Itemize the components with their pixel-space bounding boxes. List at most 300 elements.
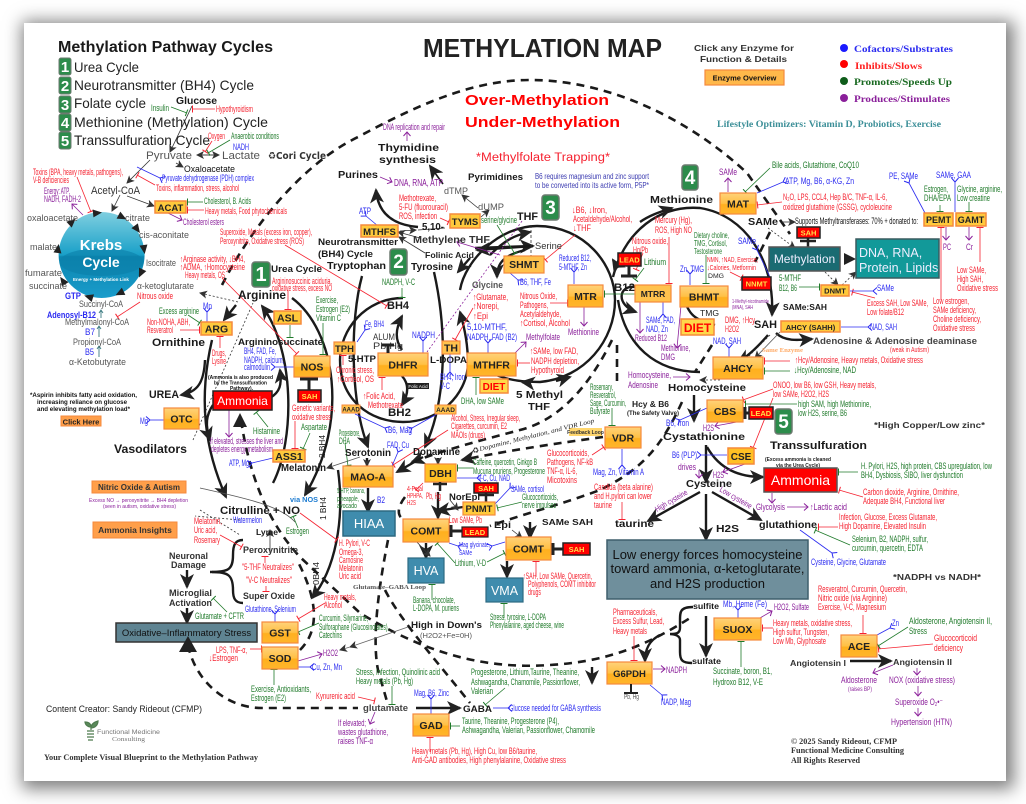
enzyme: COMT left with LEAD [403, 519, 488, 542]
panel: methionine cycle: Supports Methyltransferases: 70% + donated to: [795, 216, 918, 226]
enzyme: BHMT [680, 286, 728, 307]
ammonia box: transsulfuration side [764, 468, 837, 492]
panel: Krebs cycle [25, 208, 194, 368]
enzyme: ASL: ASL [277, 312, 299, 324]
enzyme: COMT right with SAH: SAH [569, 545, 584, 554]
enzyme: ARG: ARG [205, 324, 228, 336]
panel: transsulfuration: Selenium, B2, NADPH, sulfur, [852, 534, 928, 544]
panel: Krebs cycle: Adenosyl-B12 [47, 310, 96, 320]
VDR loop: Sage, Curcumin, [590, 398, 626, 408]
panel: methionine cycle: ↓Calories, Metformin [707, 263, 756, 272]
panel: angiotensin: Angiotensin II [893, 657, 952, 667]
enzyme: MAT [720, 193, 756, 214]
panel: angiotensin: Hypertension (HTN) [891, 717, 952, 727]
enzyme: SHMT [504, 256, 544, 273]
panel: folate cycle: 3 [545, 198, 556, 219]
panel: GABA: Stress, Infection, Quinolinic acid [356, 667, 440, 677]
panel: methionine cycle: SAMe [738, 236, 756, 246]
panel: PEMT and GAMT: PE, SAMe [889, 171, 918, 181]
inhibitor: NNMT [742, 277, 771, 290]
panel: neurotransmitter BH4 cycle: 5-HTP, banana, [337, 488, 365, 495]
panel: catecholamines: H2S [407, 500, 416, 507]
panel: folate cycle: ↓THF [573, 223, 591, 233]
panel: GABA: Ashwagandha, Valerian, Passionflower, Chamomile [462, 725, 595, 735]
panel: PEMT and GAMT: Oxidative stress [933, 323, 975, 333]
panel: catecholamines: Stress, tyrosine, L-DOPA [490, 612, 546, 622]
panel: urea cycle: Lysine [212, 356, 226, 366]
VDR loop: taurine [615, 518, 654, 530]
panel: glycolysis and Cori cycle: Cholesterol, B. Acids [204, 196, 251, 206]
panel: glycolysis and Cori cycle [33, 95, 326, 227]
panel: neurotransmitter BH4 cycle: ALUM [373, 332, 395, 342]
panel: urea cycle: Estrogen [286, 526, 309, 536]
panel: folate cycle: DNA replication and repair [383, 122, 445, 132]
panel: neurotransmitter BH4 cycle: Melatonin [339, 563, 363, 573]
panel: sulfite and G6PDH: Excess Sulfur, Lead, [613, 616, 664, 626]
panel: folate cycle: 5 Methyl [516, 389, 563, 401]
panel: urea cycle: Citrulline + NO [220, 505, 300, 517]
panel: neurotransmitter BH4 cycle: Chronic stress, [336, 365, 374, 375]
panel: methionine cycle: Reduced B12 [635, 333, 667, 343]
panel: transsulfuration: *High Copper/Low zinc* [874, 420, 986, 430]
panel: transsulfuration: ONOO, low B6, low GSH, Heavy metals, [773, 380, 876, 390]
VDR loop: Candida (beta alanine) [594, 482, 653, 492]
panel: methylation output: B12, B6 [779, 283, 797, 293]
panel: folate cycle: Reduced B12, [559, 253, 591, 263]
panel: sulfite and G6PDH: Hydroxo B12, V-E [713, 677, 763, 687]
panel: sulfite and G6PDH: H2O2, Sulfate [774, 602, 809, 612]
panel: urea cycle: Aspartate [301, 422, 327, 432]
inhibitor: NNMT: NNMT [746, 280, 768, 288]
panel: Krebs cycle: succinate [29, 281, 67, 292]
panel: folate cycle: ↓B6, ↓Iron, [572, 205, 607, 215]
panel: urea cycle: BH4, FAD, Fe, [244, 346, 276, 356]
inhibitor: SAH at DBH: SAH [478, 484, 494, 493]
diet tag: BHMT: DIET [684, 321, 712, 335]
panel: catecholamines: NorEpi [449, 492, 480, 503]
panel: glycolysis and Cori cycle: NADH, FADH-2 [44, 194, 81, 204]
panel: GABA: GABA [463, 704, 493, 714]
panel: transsulfuration: H2S [713, 470, 724, 480]
inhibitor: SAH at DBH [474, 483, 498, 493]
enzyme: SOD: SOD [269, 653, 292, 665]
panel: urea cycle: Resveratrol [147, 325, 173, 335]
panel: folate cycle: 5,10- [422, 221, 444, 233]
VDR loop: and H.pylori can lower [594, 491, 652, 501]
arrow: up to oxidative stress [179, 636, 197, 652]
panel: methionine cycle: Adenosine & Adenosine deaminase [813, 336, 977, 346]
panel: methionine cycle: DMG [708, 274, 724, 280]
panel: transsulfuration: ↑Lactic acid [810, 502, 847, 512]
panel: transsulfuration: Infection, Glucose, Excess Glutamate, [839, 512, 937, 522]
inhibitor: LEAD at MTRR [618, 253, 641, 276]
panel: methylation output: DNMT [824, 286, 846, 296]
panel: methylation output: 5-MTHF [779, 273, 801, 283]
panel: legend and enzyme overview: Promotes/Speeds Up [854, 78, 952, 88]
panel: legend and enzyme overview: Inhibits/Slows [855, 62, 922, 72]
panel: PEMT and GAMT: Glycine, arginine, [957, 184, 1002, 194]
panel: urea cycle: Rosemary [194, 535, 220, 545]
credits [44, 704, 259, 762]
panel: oxidative stress: Activation [169, 598, 212, 608]
enzyme: BHMT: BHMT [689, 292, 720, 304]
enzyme: GST [262, 622, 298, 643]
panel: catecholamines: HPHPA, [407, 493, 423, 500]
diet tag: MTHFR [480, 379, 508, 393]
panel: folate cycle: Nitrous Oxide, [520, 291, 557, 301]
enzyme: MAT: MAT [727, 198, 750, 210]
panel: methionine cycle: Lithium [644, 257, 666, 267]
panel: sulfite and G6PDH: NADP, Mag [661, 697, 691, 707]
panel: glycolysis and Cori cycle: Cholesterol esters [183, 217, 224, 227]
panel: urea cycle: Mg [140, 416, 148, 426]
panel: angiotensin [790, 572, 992, 727]
enzyme: OTC: OTC [170, 414, 193, 426]
panel: GABA: Heavy metals (Pb, Hg), High Cu, low B6/taurine, [412, 746, 537, 756]
panel: transsulfuration: via the Urea Cycle) [776, 463, 820, 469]
panel: glycolysis and Cori cycle: Lactate [222, 150, 260, 162]
metabolite box: HIAA: HIAA [354, 516, 384, 531]
panel: transsulfuration: Low cysteine [718, 485, 754, 511]
panel: transsulfuration: Adequate BH4, Functional liver [863, 496, 945, 506]
panel: glycolysis and Cori cycle: Insulin [151, 103, 169, 113]
panel: urea cycle: Non-NOHA, ABH, [147, 317, 190, 327]
enzyme: MAO-A [343, 466, 393, 487]
panel: folate cycle: ↑SAMe, low FAD, [530, 346, 578, 356]
panel: neurotransmitter BH4 cycle: ↑Cortisol, OS [337, 374, 374, 384]
panel: catecholamines: ↑SAH, Low SAMe, Quercetin, [523, 571, 592, 581]
callout: low energy box [607, 540, 808, 599]
VDR loop: Micotoxins [547, 475, 577, 485]
enzyme: COMT left with LEAD: LEAD [465, 528, 486, 537]
panel: urea cycle: Vitamin C [316, 313, 341, 323]
panel: neurotransmitter BH4 cycle: 5-HTP [348, 354, 377, 365]
enzyme: CSE: CSE [731, 452, 752, 463]
panel: glycolysis and Cori cycle: NADH [233, 142, 249, 152]
arrow: dashed up into ammonia [233, 413, 247, 427]
panel: methionine cycle: NAD, Zn [646, 324, 668, 334]
panel: glycolysis and Cori cycle: Anaerobic conditions [231, 131, 279, 141]
teal precursor arrows [97, 310, 103, 357]
enzyme: DHFR: DHFR [388, 360, 418, 372]
panel: neurotransmitter BH4 cycle: (BH4) Cycle [318, 249, 373, 260]
panel: glycolysis and Cori cycle: V-B deficiencies [33, 175, 69, 185]
panel: methionine cycle: Dietary choline, [694, 231, 729, 240]
panel: urea cycle: (Ammonia is also produced [208, 375, 273, 381]
panel: PEMT and GAMT: DHA/EPA [924, 193, 951, 203]
inhibitor lines [77, 109, 980, 752]
panel: Krebs cycle: fumarate [25, 268, 62, 279]
panel: Krebs cycle: Krebs [80, 237, 122, 254]
panel: neurotransmitter BH4 cycle: Pb Hg [373, 341, 403, 351]
panel: catecholamines: Epi [494, 520, 511, 531]
VDR loop: Feedback Loop [567, 430, 604, 436]
panel: glycolysis and Cori cycle: ♻Cori Cycle [268, 151, 326, 162]
over and under methylation headings: Under-Methylation [465, 115, 620, 131]
panel: transsulfuration: Carbon dioxide, Arginine, Ornithine, [863, 487, 959, 497]
panel: Krebs cycle: cis-aconitate [139, 230, 189, 241]
panel: Krebs cycle: Isocitrate [146, 258, 176, 268]
panel: glycolysis and Cori cycle: Pyruvate dehydrogenase (PDH) complex [162, 173, 254, 183]
panel: catecholamines: drugs [528, 587, 541, 597]
panel: angiotensin: Superoxide O₂•⁻ [895, 697, 943, 707]
metabolite box: HVA: HVA [414, 564, 439, 578]
panel: catecholamines: Mucuna pruriens, Progesterone [473, 466, 545, 476]
panel: GABA: If elevated; [338, 718, 366, 728]
thick solid pathway arrows [181, 166, 891, 708]
panel: urea cycle: 1 [255, 264, 267, 286]
enzyme: NOS with SAH inhibitor [294, 356, 330, 402]
panel: catecholamines: Glucocorticoids, [522, 492, 558, 502]
enzyme: COMT right with SAH: COMT [513, 544, 545, 556]
panel: transsulfuration: drives [678, 462, 696, 472]
panel: urea cycle: depletes energy metabolism [211, 444, 273, 454]
panel: methylation output: DNA, RNA, [859, 246, 922, 260]
panel: catecholamines: Pb, Hg [426, 491, 441, 501]
panel: sulfite and G6PDH: Heavy metals, oxidative stress, [773, 618, 852, 628]
over and under methylation headings [465, 93, 620, 164]
panel: GABA: glutamate [363, 703, 408, 713]
panel: urea cycle: Exercise, [316, 295, 338, 305]
panel: oxidative stress: Cu, Zn, Mn [312, 662, 342, 672]
panel: urea cycle: Excess arginine [159, 306, 199, 316]
panel: methionine cycle: TMG, Cortisol, [694, 239, 727, 248]
panel: urea cycle: oxidative stress [292, 412, 331, 422]
panel: oxidative stress: ↓Estrogen [209, 653, 238, 663]
VDR loop: Rosemary, [590, 382, 613, 392]
panel: glycolysis and Cori cycle: Pyruvate [146, 150, 192, 162]
panel: methionine cycle: Homocysteine [668, 382, 746, 394]
panel: urea cycle: If elevated, stresses the liver and [210, 436, 283, 446]
panel: GABA: Taurine, Theanine, Progesterone (P4), [462, 716, 559, 726]
enzyme: DHFR [378, 344, 428, 376]
panel: oxidative stress: Neuronal [169, 551, 208, 561]
panel: transsulfuration: high SAM, high Methionine, [798, 399, 871, 409]
panel: folate cycle: ↑Epi [473, 311, 488, 321]
panel: folate cycle: Methionine [568, 327, 599, 337]
panel: folate cycle: serine/glycine [481, 215, 517, 225]
panel: transsulfuration: 5 [778, 412, 789, 433]
enzyme: AHCY: AHCY [723, 363, 753, 375]
VDR loop [472, 382, 654, 530]
enzyme: ASL [274, 311, 301, 324]
panel: neurotransmitter BH4 cycle: H. Pylori, V-C [339, 538, 370, 548]
panel: neurotransmitter BH4 cycle: avocado [337, 503, 357, 510]
panel: methionine cycle: oxidized glutathione (GSSG), cycloleucine [783, 202, 892, 212]
panel: urea cycle: Ornithine [152, 337, 205, 349]
panel: methionine cycle: SAMe, FAD, [646, 315, 675, 325]
panel: folate cycle: synthesis [379, 154, 436, 166]
panel: Krebs cycle: Nitrous oxide [137, 291, 173, 301]
panel: urea cycle: 0BH4 [312, 561, 321, 585]
panel: urea cycle: 1 BH4 [319, 496, 328, 520]
panel: angiotensin: Angiotensin I [790, 658, 846, 668]
panel: methionine cycle: Methionine [650, 194, 713, 206]
panel: urea cycle: Argininosuccinic aciduria, [272, 276, 332, 286]
enzyme: DBH: DBH [429, 468, 452, 480]
panel: pathway cycles legend: Methylation Pathway Cycles [58, 39, 273, 56]
panel: catecholamines: L-DOPA, M. puriens [413, 603, 459, 613]
panel: folate cycle: Hypothyroid [531, 365, 564, 375]
panel: sulfite and G6PDH: Pb, Hg [624, 694, 639, 701]
panel: methionine cycle: 1-Methyl-nicotinamide [732, 299, 769, 305]
enzyme: MTRR: MTRR [641, 289, 665, 299]
panel: methylation output [769, 227, 939, 317]
panel: methionine cycle: 4 [685, 168, 696, 189]
panel: folate cycle: ↑Glutamate, [473, 292, 508, 302]
panel: angiotensin: Exercise, V-C, Magnesium [818, 602, 886, 612]
panel: methionine cycle: NAD, SAH [870, 322, 897, 332]
panel: Krebs cycle: GTP [65, 291, 81, 301]
panel: transsulfuration: low SAMe, H2O2, H2S [773, 389, 829, 399]
enzyme: COMT left with LEAD: COMT [411, 526, 442, 538]
panel: neurotransmitter BH4 cycle: ↑Folic Acid, [363, 391, 395, 401]
panel: folate cycle: Pyrimidines [468, 172, 523, 183]
panel: neurotransmitter BH4 cycle: 2 [393, 252, 404, 273]
panel: PEMT and GAMT: Oxidative stress [957, 283, 998, 293]
panel: transsulfuration: High cysteine [654, 488, 690, 514]
panel: methionine cycle: NAD, SAH [713, 336, 741, 346]
panel: GABA: Heavy metals (Pb, Hg) [356, 676, 413, 686]
button: nitric oxide and autism [89, 481, 188, 510]
panel: transsulfuration: H2S [703, 423, 714, 433]
panel: oxidative stress: H2O2 [323, 648, 338, 658]
enzyme: CBS with LEAD: CBS [714, 406, 736, 418]
panel: neurotransmitter BH4 cycle: Progesterone, [339, 428, 360, 438]
panel: sulfite and G6PDH: G6PDH [613, 669, 646, 680]
panel: PEMT and GAMT: Choline deficiency, [933, 314, 981, 324]
panel: PEMT and GAMT: SAMe, GAA [936, 170, 971, 180]
panel: PEMT and GAMT: Estrogen, [924, 184, 948, 194]
panel: sulfite and G6PDH: Pharmaceuticals, [613, 607, 657, 617]
panel: folate cycle: DNA, RNA, ATP [394, 178, 443, 189]
panel: neurotransmitter BH4 cycle: Alcohol, Stress, Irregular sleep, [451, 413, 520, 423]
panel: neurotransmitter BH4 cycle: Dopamine [413, 447, 460, 458]
credits: Consulting [112, 737, 145, 743]
panel: neurotransmitter BH4 cycle: Serotonin [345, 448, 391, 459]
panel: PEMT and GAMT: SAMe deficiency, [933, 305, 976, 315]
panel: folate cycle: DHA, low SAMe [461, 396, 504, 406]
panel: sulfite and G6PDH: High sulfur, Tungsten, [773, 627, 829, 637]
enzyme: TYMS: TYMS [452, 217, 478, 228]
panel: neurotransmitter BH4 cycle: Fe, BH4 [365, 319, 384, 329]
callout: aspirin note: and elevating methylation load* [37, 406, 130, 413]
panel: methionine cycle: Methionine, [661, 343, 690, 353]
panel: sulfite and G6PDH: sulfate [692, 656, 721, 666]
panel: folate cycle: Methylene THF [413, 234, 491, 246]
panel: folate cycle: Methylfolate [526, 332, 560, 342]
panel: methionine cycle: B12 [614, 282, 635, 294]
enzyme: MTR: MTR [574, 291, 597, 303]
panel: urea cycle: by the Transsulfuration [214, 380, 268, 386]
panel: urea cycle: Genetic variants, [292, 403, 335, 413]
panel: methionine cycle: Mercury (Hg), [655, 215, 692, 225]
panel: angiotensin: Nitric oxide (via Arginine) [818, 593, 887, 603]
panel: folate cycle: dTMP [444, 186, 468, 196]
panel: catecholamines: 4-Fetal [407, 486, 423, 493]
panel: angiotensin: Aldosterone [841, 675, 877, 685]
panel: oxidative stress: Exercise, Antioxidants, [251, 684, 311, 694]
panel: legend and enzyme overview: Lifestyle Optimizers: Vitamin D, Probiotics, Exercise [717, 119, 941, 129]
ammonia box: urea side: Ammonia [217, 394, 268, 408]
panel: neurotransmitter BH4 cycle: V-C [440, 381, 450, 391]
VDR loop: VDR [612, 432, 635, 444]
panel: urea cycle: UREA [149, 389, 179, 401]
panel: folate cycle: THF [517, 211, 538, 223]
panel: neurotransmitter BH4 cycle: BH4, Iron [440, 372, 465, 382]
panel: methionine cycle: ATP, Mg, B6, α-KG, Zn [785, 176, 854, 187]
panel: oxidative stress: Alcohol [324, 600, 342, 610]
panel: folate cycle [338, 122, 650, 413]
enzyme: AAAD left [342, 405, 360, 414]
panel: PEMT and GAMT: High SAH, [957, 274, 983, 284]
panel: transsulfuration: Cysteine [686, 479, 732, 490]
panel: urea cycle: Estrogen (E2) [316, 304, 350, 314]
panel: transsulfuration: low H2S, serine, B6 [798, 408, 847, 418]
panel: oxidative stress: Oxidative–Inflammatory Stress [122, 628, 251, 639]
panel: methionine cycle: SAMe [719, 167, 737, 177]
panel: pathway cycles legend: 4 [61, 115, 70, 132]
panel: urea cycle: Histamine [253, 426, 280, 436]
panel: oxidative stress: LPS, TNF-α, [216, 645, 247, 655]
panel: methionine cycle: N₂O, LPS, CCL4, Hep B/C, TNF-α, IL-6, [783, 192, 887, 202]
panel: Krebs cycle: α-ketoglutarate [137, 281, 194, 292]
panel: folate cycle: Pathogens, [520, 300, 548, 310]
product lines [72, 132, 969, 724]
panel: pathway cycles legend: 2 [61, 78, 69, 95]
panel: transsulfuration: Transsulfuration [770, 440, 867, 452]
panel: methionine cycle: ↑Hcy/Adenosine, Heavy metals, Oxidative stress [795, 355, 923, 365]
panel: methylation output: Low folate/B12 [867, 307, 904, 317]
enzyme: DBH [425, 464, 456, 491]
panel: neurotransmitter BH4 cycle: Tyrosine [411, 261, 453, 273]
panel: GABA: Progesterone, Lithium,Taurine, Theanine, [471, 667, 579, 677]
panel: methionine cycle: Adenosine [628, 380, 658, 390]
enzyme: CBS with LEAD [707, 400, 773, 422]
panel: urea cycle: calmodulin [244, 362, 270, 372]
panel: catecholamines: High in Down's [411, 620, 482, 630]
panel: sulfite and G6PDH [607, 599, 852, 707]
panel: catecholamines: Lithium, V-D [455, 558, 486, 568]
panel: folate cycle: B6, THF, Fe [520, 277, 551, 287]
panel: transsulfuration: High Dopamine, Elevated Insulin [839, 521, 926, 531]
enzyme: AHCY (SAHH) [781, 321, 840, 332]
panel: Krebs cycle: B7 [85, 327, 95, 337]
panel: urea cycle: Argininosuccinate [238, 337, 323, 348]
panel: catecholamines: V-C, Cu, NAD [478, 473, 510, 483]
panel: glycolysis and Cori cycle: Acetyl-CoA [91, 185, 141, 197]
panel: oxidative stress: "5-THF Neutralizes" [242, 562, 294, 572]
panel: legend and enzyme overview: Produces/Stimulates [854, 95, 950, 105]
enzyme: SHMT: SHMT [509, 259, 539, 271]
enzyme: MTRR [635, 285, 671, 302]
panel: folate cycle: 5-MTHF, Zn [559, 262, 587, 272]
panel: legend and enzyme overview [694, 43, 953, 129]
panel: sulfite and G6PDH: sulfite [693, 601, 719, 611]
copyright: Functional Medicine Consulting [791, 746, 904, 755]
panel: oxidative stress: Glutamate + CFTR [195, 611, 244, 621]
panel: legend and enzyme overview: Cofactors/Substrates [854, 45, 953, 55]
panel: sulfite and G6PDH: NADPH [666, 665, 687, 675]
panel: pathway cycles legend: Methionine (Methylation) Cycle [74, 114, 268, 130]
panel: legend and enzyme overview: Enzyme Overview [713, 74, 777, 82]
panel: sulfite and G6PDH: Succinate, boron, B1, [713, 666, 772, 676]
panel: methionine cycle: H2O2 [725, 324, 739, 334]
enzyme: ARG [201, 322, 232, 336]
panel: folate cycle: 5-FU (fluorouracil) [399, 202, 448, 212]
panel: oxidative stress: Sulforaphane (Glucosinolates), [319, 622, 389, 632]
enzyme: AHCY [713, 357, 763, 379]
